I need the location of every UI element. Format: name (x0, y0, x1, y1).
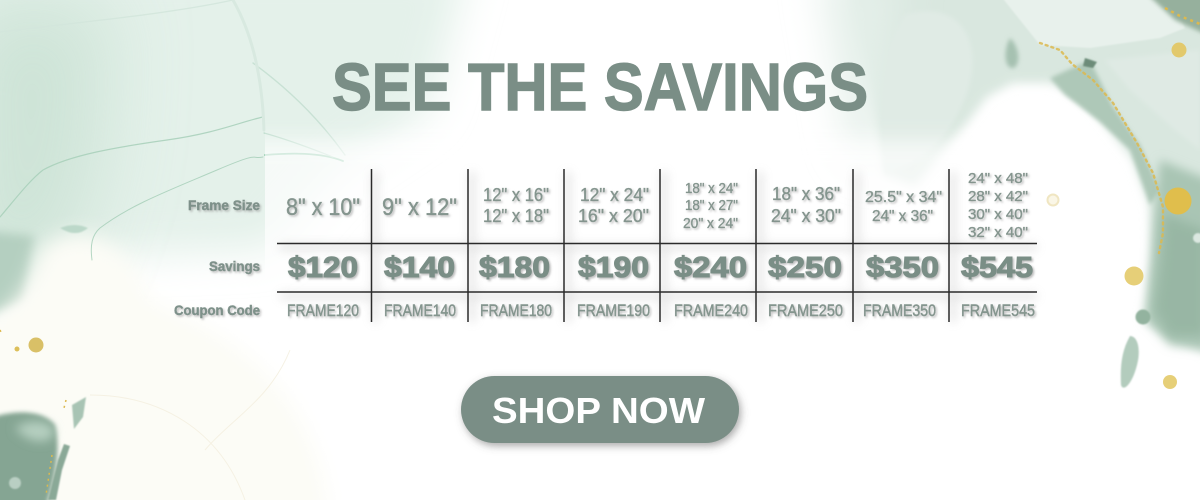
row: coupon codes: FRAME190 (577, 302, 650, 320)
row: frame sizes: 30" x 40" (968, 207, 1028, 223)
row: coupon codes (287, 302, 1035, 320)
row: frame sizes: 28" x 42" (968, 189, 1028, 205)
row: coupon codes: FRAME250 (768, 302, 843, 320)
row: coupon codes: FRAME180 (480, 302, 552, 320)
row: savings amounts: $250 (768, 252, 842, 284)
row: frame sizes: 20" x 24" (683, 216, 738, 232)
row: savings amounts (288, 252, 1033, 284)
row: frame sizes: 12" x 16" (483, 184, 549, 205)
left wash (0, 0, 470, 500)
row: frame sizes: 18" x 24" (685, 181, 738, 197)
row: savings amounts: $120 (288, 252, 358, 284)
row: savings amounts: $140 (384, 252, 455, 284)
row: savings amounts: $545 (961, 252, 1033, 284)
row: coupon codes: FRAME140 (384, 302, 456, 320)
row labels: Frame Size (188, 197, 260, 213)
row labels: Coupon Code (174, 302, 260, 318)
title: SEE THE SAVINGS (332, 50, 868, 125)
button: shop now (461, 376, 739, 443)
top right wash (820, 0, 1200, 388)
grid line soft shadows and lines (277, 169, 1037, 322)
row: savings amounts: $350 (866, 252, 939, 284)
row labels (174, 197, 260, 318)
row: frame sizes: 12" x 24" (580, 184, 649, 205)
table: savings grid (174, 169, 1037, 322)
veins (0, 0, 345, 260)
row: frame sizes: 8" x 10" (286, 194, 360, 221)
row: frame sizes: 25.5" x 34" (865, 189, 942, 206)
row: frame sizes: 16" x 20" (578, 205, 649, 226)
row: frame sizes: 18" x 27" (685, 198, 738, 214)
row: frame sizes: 24" x 36" (872, 208, 933, 225)
row: frame sizes (286, 171, 1028, 241)
row: coupon codes: FRAME545 (961, 302, 1035, 320)
row: coupon codes: FRAME240 (674, 302, 748, 320)
row: frame sizes: 12" x 18" (483, 205, 549, 226)
row: coupon codes: FRAME350 (863, 302, 936, 320)
row: frame sizes: 9" x 12" (382, 194, 457, 221)
row: coupon codes: FRAME120 (287, 302, 359, 320)
row: savings amounts: $180 (479, 252, 550, 284)
row: savings amounts: $240 (674, 252, 747, 284)
row: frame sizes: 24" x 48" (968, 171, 1028, 187)
row: savings amounts: $190 (578, 252, 649, 284)
row: frame sizes: 32" x 40" (968, 225, 1028, 241)
bottom left dark patch (0, 397, 86, 500)
row labels: Savings (209, 258, 260, 274)
panel backing (265, 132, 951, 246)
button: shop now: SHOP NOW (492, 390, 705, 431)
row: frame sizes: 18" x 36" (772, 183, 840, 204)
row: frame sizes: 24" x 30" (771, 205, 841, 226)
